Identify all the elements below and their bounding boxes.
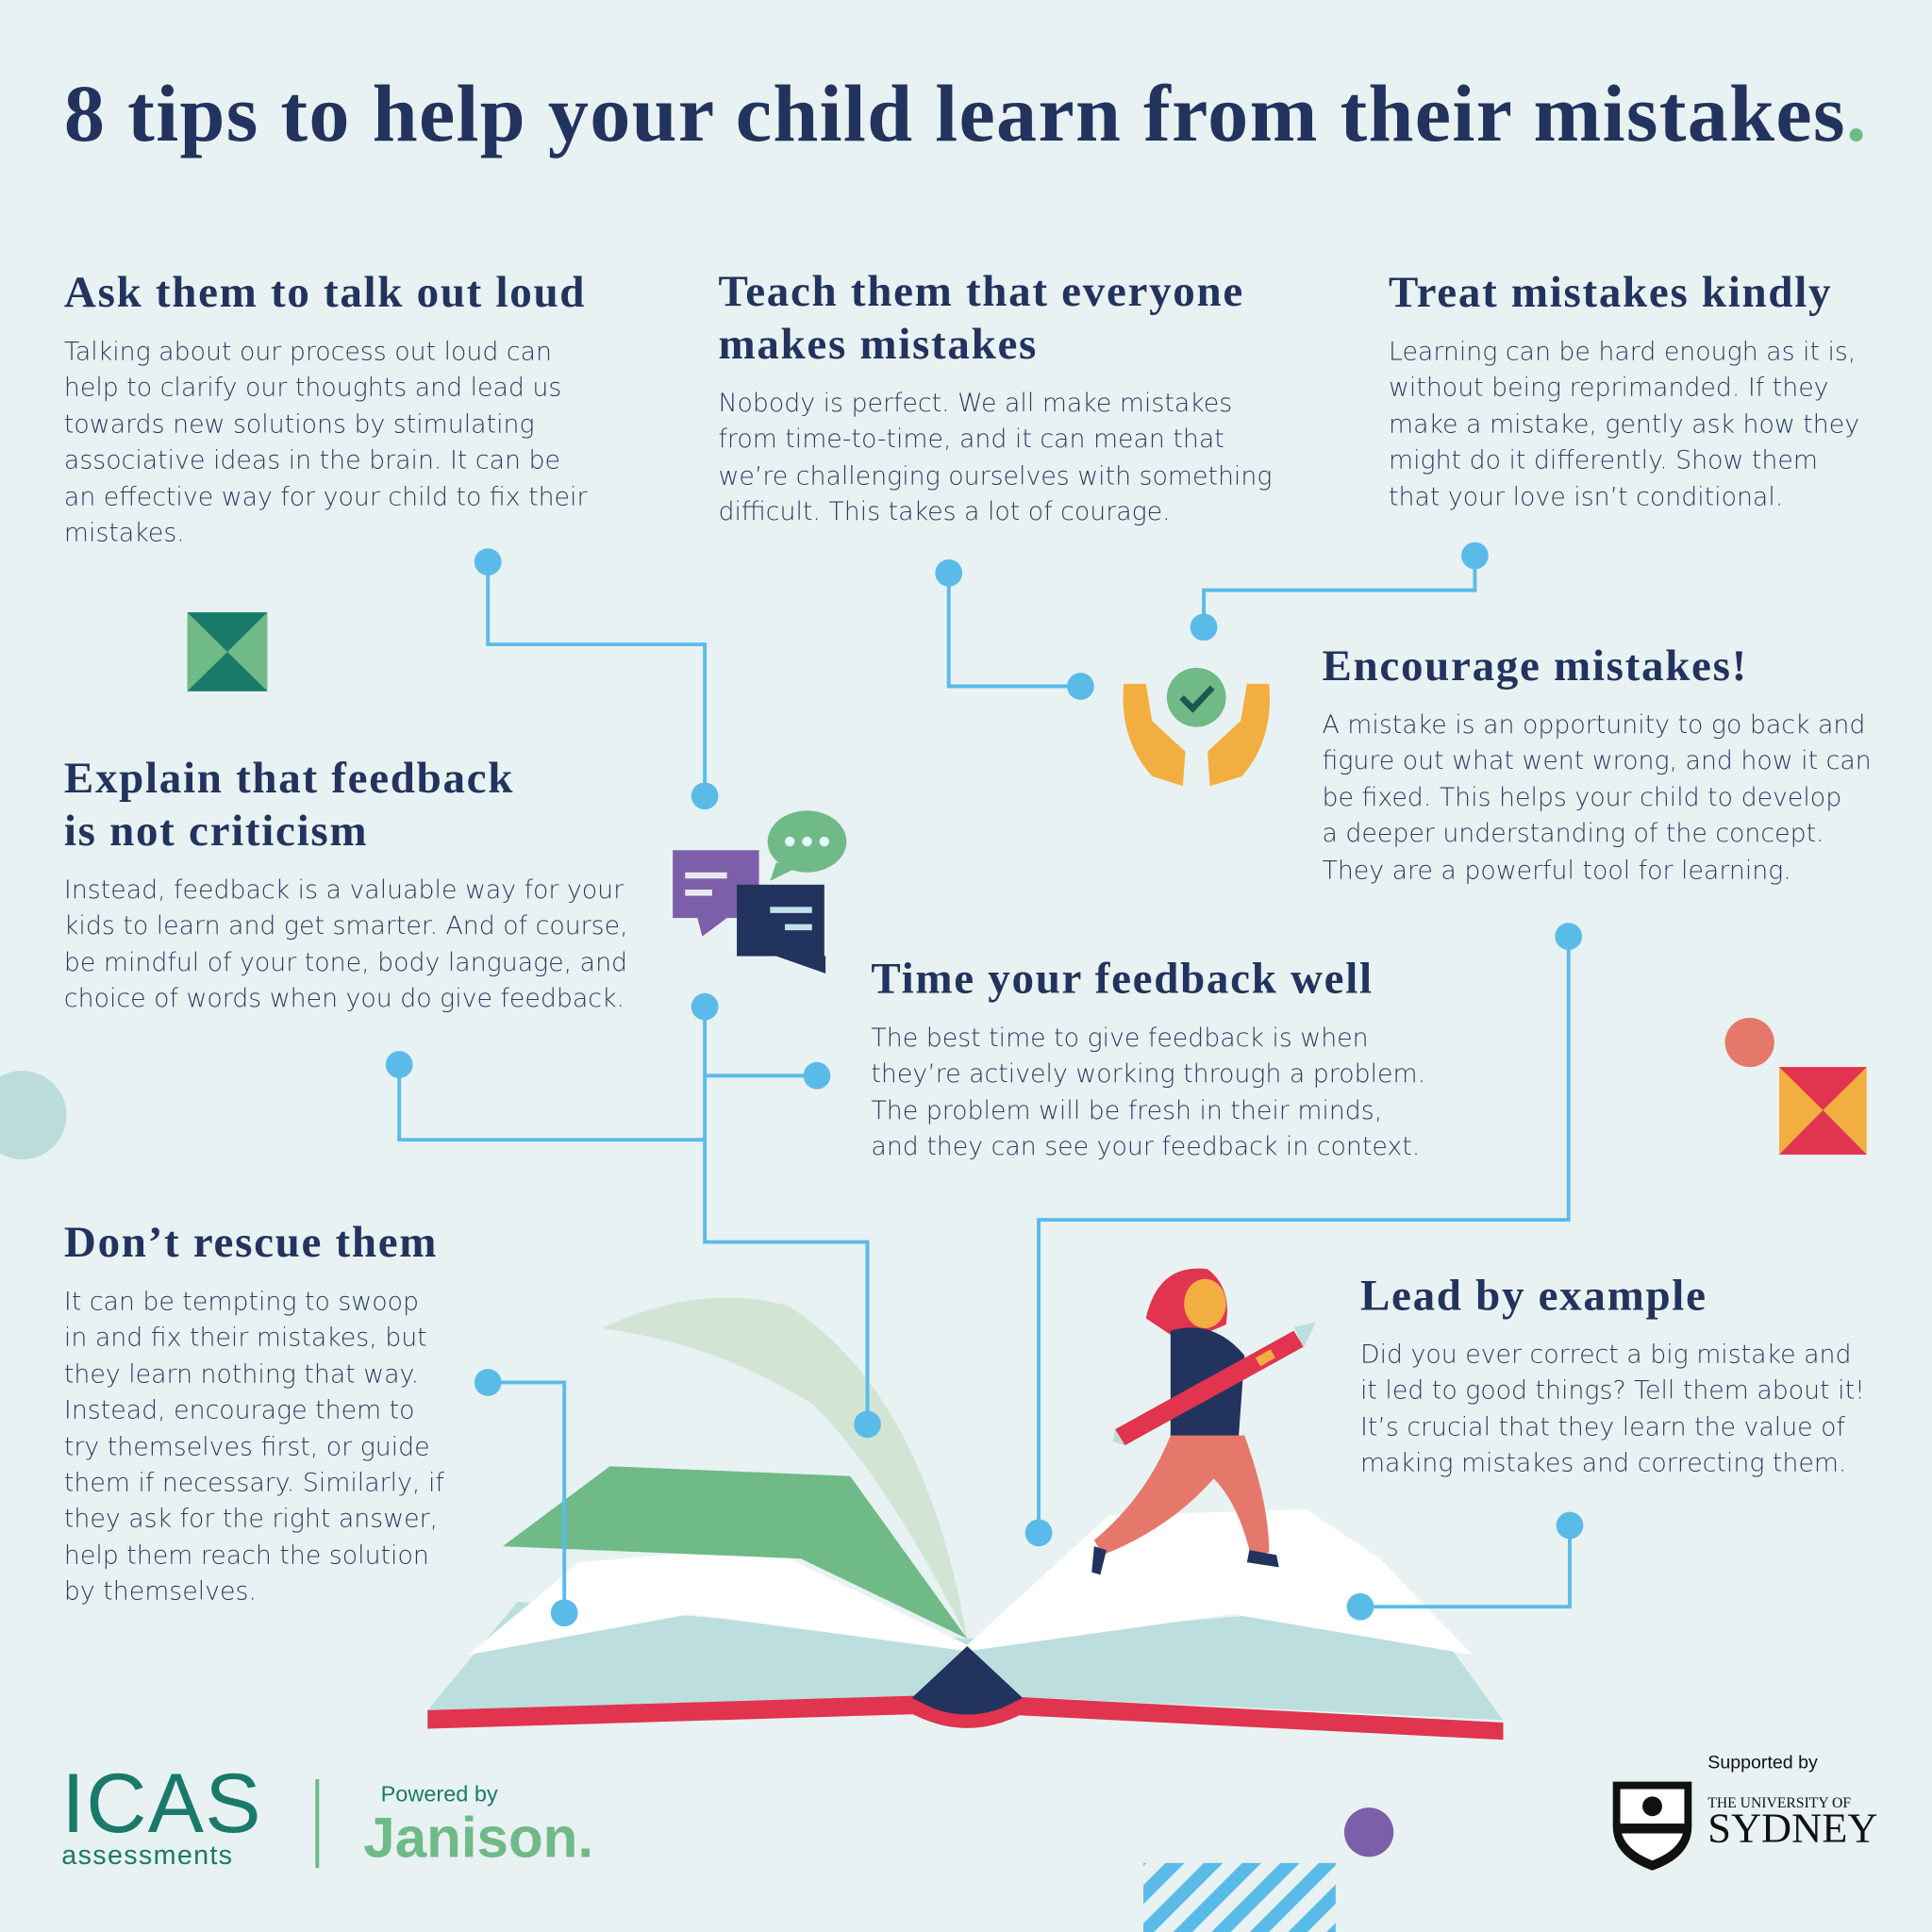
- tip: talk out loud: [64, 267, 587, 547]
- tip: lead by example: Lead by example: [1360, 1271, 1707, 1320]
- tip: everyone makes mistakes: [718, 266, 1272, 526]
- decorative teal circle: [0, 1071, 67, 1159]
- book: [427, 1297, 1503, 1740]
- tip: encourage mistakes: [1322, 641, 1872, 885]
- tip: feedback not criticism: Explain that feedback: [64, 753, 514, 802]
- tip: don't rescue: help them reach the solution: [64, 1540, 429, 1570]
- icon: speech bubbles: [673, 810, 846, 974]
- icon: green square: [188, 612, 267, 691]
- tip: everyone makes mistakes: from time-to-time, and it can mean that: [718, 425, 1224, 454]
- tip: lead by example: it led to good things? Tell them about it!: [1360, 1375, 1865, 1406]
- logo: Janison: Powered by: [381, 1782, 498, 1807]
- tip: feedback not criticism: [64, 753, 628, 1013]
- tip: everyone makes mistakes: difficult. This takes a lot of courage.: [718, 497, 1171, 526]
- tip: time feedback: and they can see your feedback in context.: [871, 1131, 1420, 1161]
- tip: don't rescue: [64, 1217, 444, 1606]
- tip: lead by example: Did you ever correct a big mistake and: [1360, 1340, 1852, 1369]
- tip: time feedback: The problem will be fresh in their minds,: [871, 1095, 1382, 1124]
- tip: talk out loud: mistakes.: [64, 518, 185, 547]
- tip: treat kindly: [1389, 267, 1859, 511]
- logo: University of Sydney: Supported by: [1707, 1752, 1818, 1774]
- logo: University of Sydney: [1613, 1752, 1877, 1871]
- logo: University of Sydney: THE UNIVERSITY OF: [1707, 1794, 1851, 1811]
- tip: lead by example: It’s crucial that they learn the value of: [1360, 1412, 1845, 1441]
- tip: everyone makes mistakes: we’re challenging ourselves with something: [718, 460, 1272, 491]
- tip: everyone makes mistakes: Teach them that everyone: [718, 266, 1244, 315]
- tip: talk out loud: towards new solutions by stimulating: [64, 408, 535, 439]
- tip: treat kindly: without being reprimanded. If they: [1389, 373, 1829, 402]
- tip: talk out loud: associative ideas in the brain. It can be: [64, 445, 560, 475]
- tip: encourage mistakes: a deeper understanding of the concept.: [1322, 819, 1824, 848]
- tip: talk out loud: Ask them to talk out loud: [64, 267, 586, 317]
- tip: don't rescue: Instead, encourage them to: [64, 1395, 415, 1424]
- tip: time feedback: they’re actively working through a problem.: [871, 1058, 1425, 1089]
- divider: [315, 1779, 319, 1868]
- tip: don't rescue: they ask for the right answer,: [64, 1504, 438, 1533]
- tip: feedback not criticism: is not criticism: [64, 806, 368, 855]
- tip: treat kindly: make a mistake, gently ask how they: [1389, 408, 1859, 439]
- tip: feedback not criticism: Instead, feedback is a valuable way for your: [64, 874, 624, 905]
- tip: time feedback: The best time to give feedback is when: [871, 1023, 1369, 1052]
- tip: encourage mistakes: be fixed. This helps your child to develop: [1322, 782, 1841, 811]
- tip: everyone makes mistakes: makes mistakes: [718, 319, 1038, 369]
- tip: treat kindly: might do it differently. Show them: [1389, 445, 1818, 475]
- tip: treat kindly: Treat mistakes kindly: [1389, 267, 1832, 317]
- logo: ICAS: ICAS: [61, 1757, 262, 1851]
- tip: treat kindly: Learning can be hard enough as it is,: [1389, 337, 1856, 366]
- icon: hands with check: [1124, 668, 1270, 786]
- tip: feedback not criticism: be mindful of your tone, body language, and: [64, 947, 627, 977]
- tip: feedback not criticism: choice of words when you do give feedback.: [64, 984, 625, 1013]
- tip: talk out loud: an effective way for your child to fix their: [64, 481, 587, 511]
- tip: don't rescue: they learn nothing that way.: [64, 1358, 419, 1389]
- logo: ICAS: assessments: [61, 1840, 233, 1871]
- tip: don't rescue: in and fix their mistakes, but: [64, 1323, 427, 1352]
- tip: lead by example: making mistakes and correcting them.: [1360, 1448, 1846, 1477]
- striped block: [1143, 1863, 1336, 1932]
- tip: time feedback: [871, 954, 1425, 1161]
- tip: encourage mistakes: A mistake is an opportunity to go back and: [1322, 709, 1865, 740]
- tip: don't rescue: try themselves first, or guide: [64, 1431, 430, 1461]
- tip: don't rescue: them if necessary. Similarly, if: [64, 1468, 444, 1497]
- purple circle: [1344, 1807, 1393, 1857]
- tip: encourage mistakes: They are a powerful tool for learning.: [1322, 855, 1791, 884]
- tip: talk out loud: help to clarify our thoughts and lead us: [64, 373, 561, 402]
- tip: encourage mistakes: figure out what went wrong, and how it can: [1322, 746, 1872, 775]
- tip: talk out loud: Talking about our process out loud can: [64, 337, 552, 366]
- icon: coral circle and square: [1725, 1018, 1867, 1155]
- tip: everyone makes mistakes: Nobody is perfect. We all make mistakes: [718, 388, 1232, 418]
- tip: don't rescue: by themselves.: [64, 1576, 257, 1606]
- connectors: [399, 556, 1570, 1613]
- tip: lead by example: [1360, 1271, 1865, 1477]
- tip: feedback not criticism: kids to learn and get smarter. And of course,: [64, 911, 628, 941]
- tip: time feedback: Time your feedback well: [871, 954, 1374, 1003]
- tip: treat kindly: that your love isn’t conditional.: [1389, 481, 1783, 511]
- logo: University of Sydney: SYDNEY: [1707, 1807, 1877, 1852]
- tip: don't rescue: Don’t rescue them: [64, 1217, 438, 1267]
- tip: don't rescue: It can be tempting to swoop: [64, 1287, 419, 1316]
- tip: encourage mistakes: Encourage mistakes!: [1322, 641, 1748, 690]
- title: 8 tips to help your child learn from their mistakes.: [64, 69, 1868, 158]
- logo: Janison: Janison.: [363, 1805, 593, 1869]
- illustration: girl with pencil: [1091, 1269, 1316, 1574]
